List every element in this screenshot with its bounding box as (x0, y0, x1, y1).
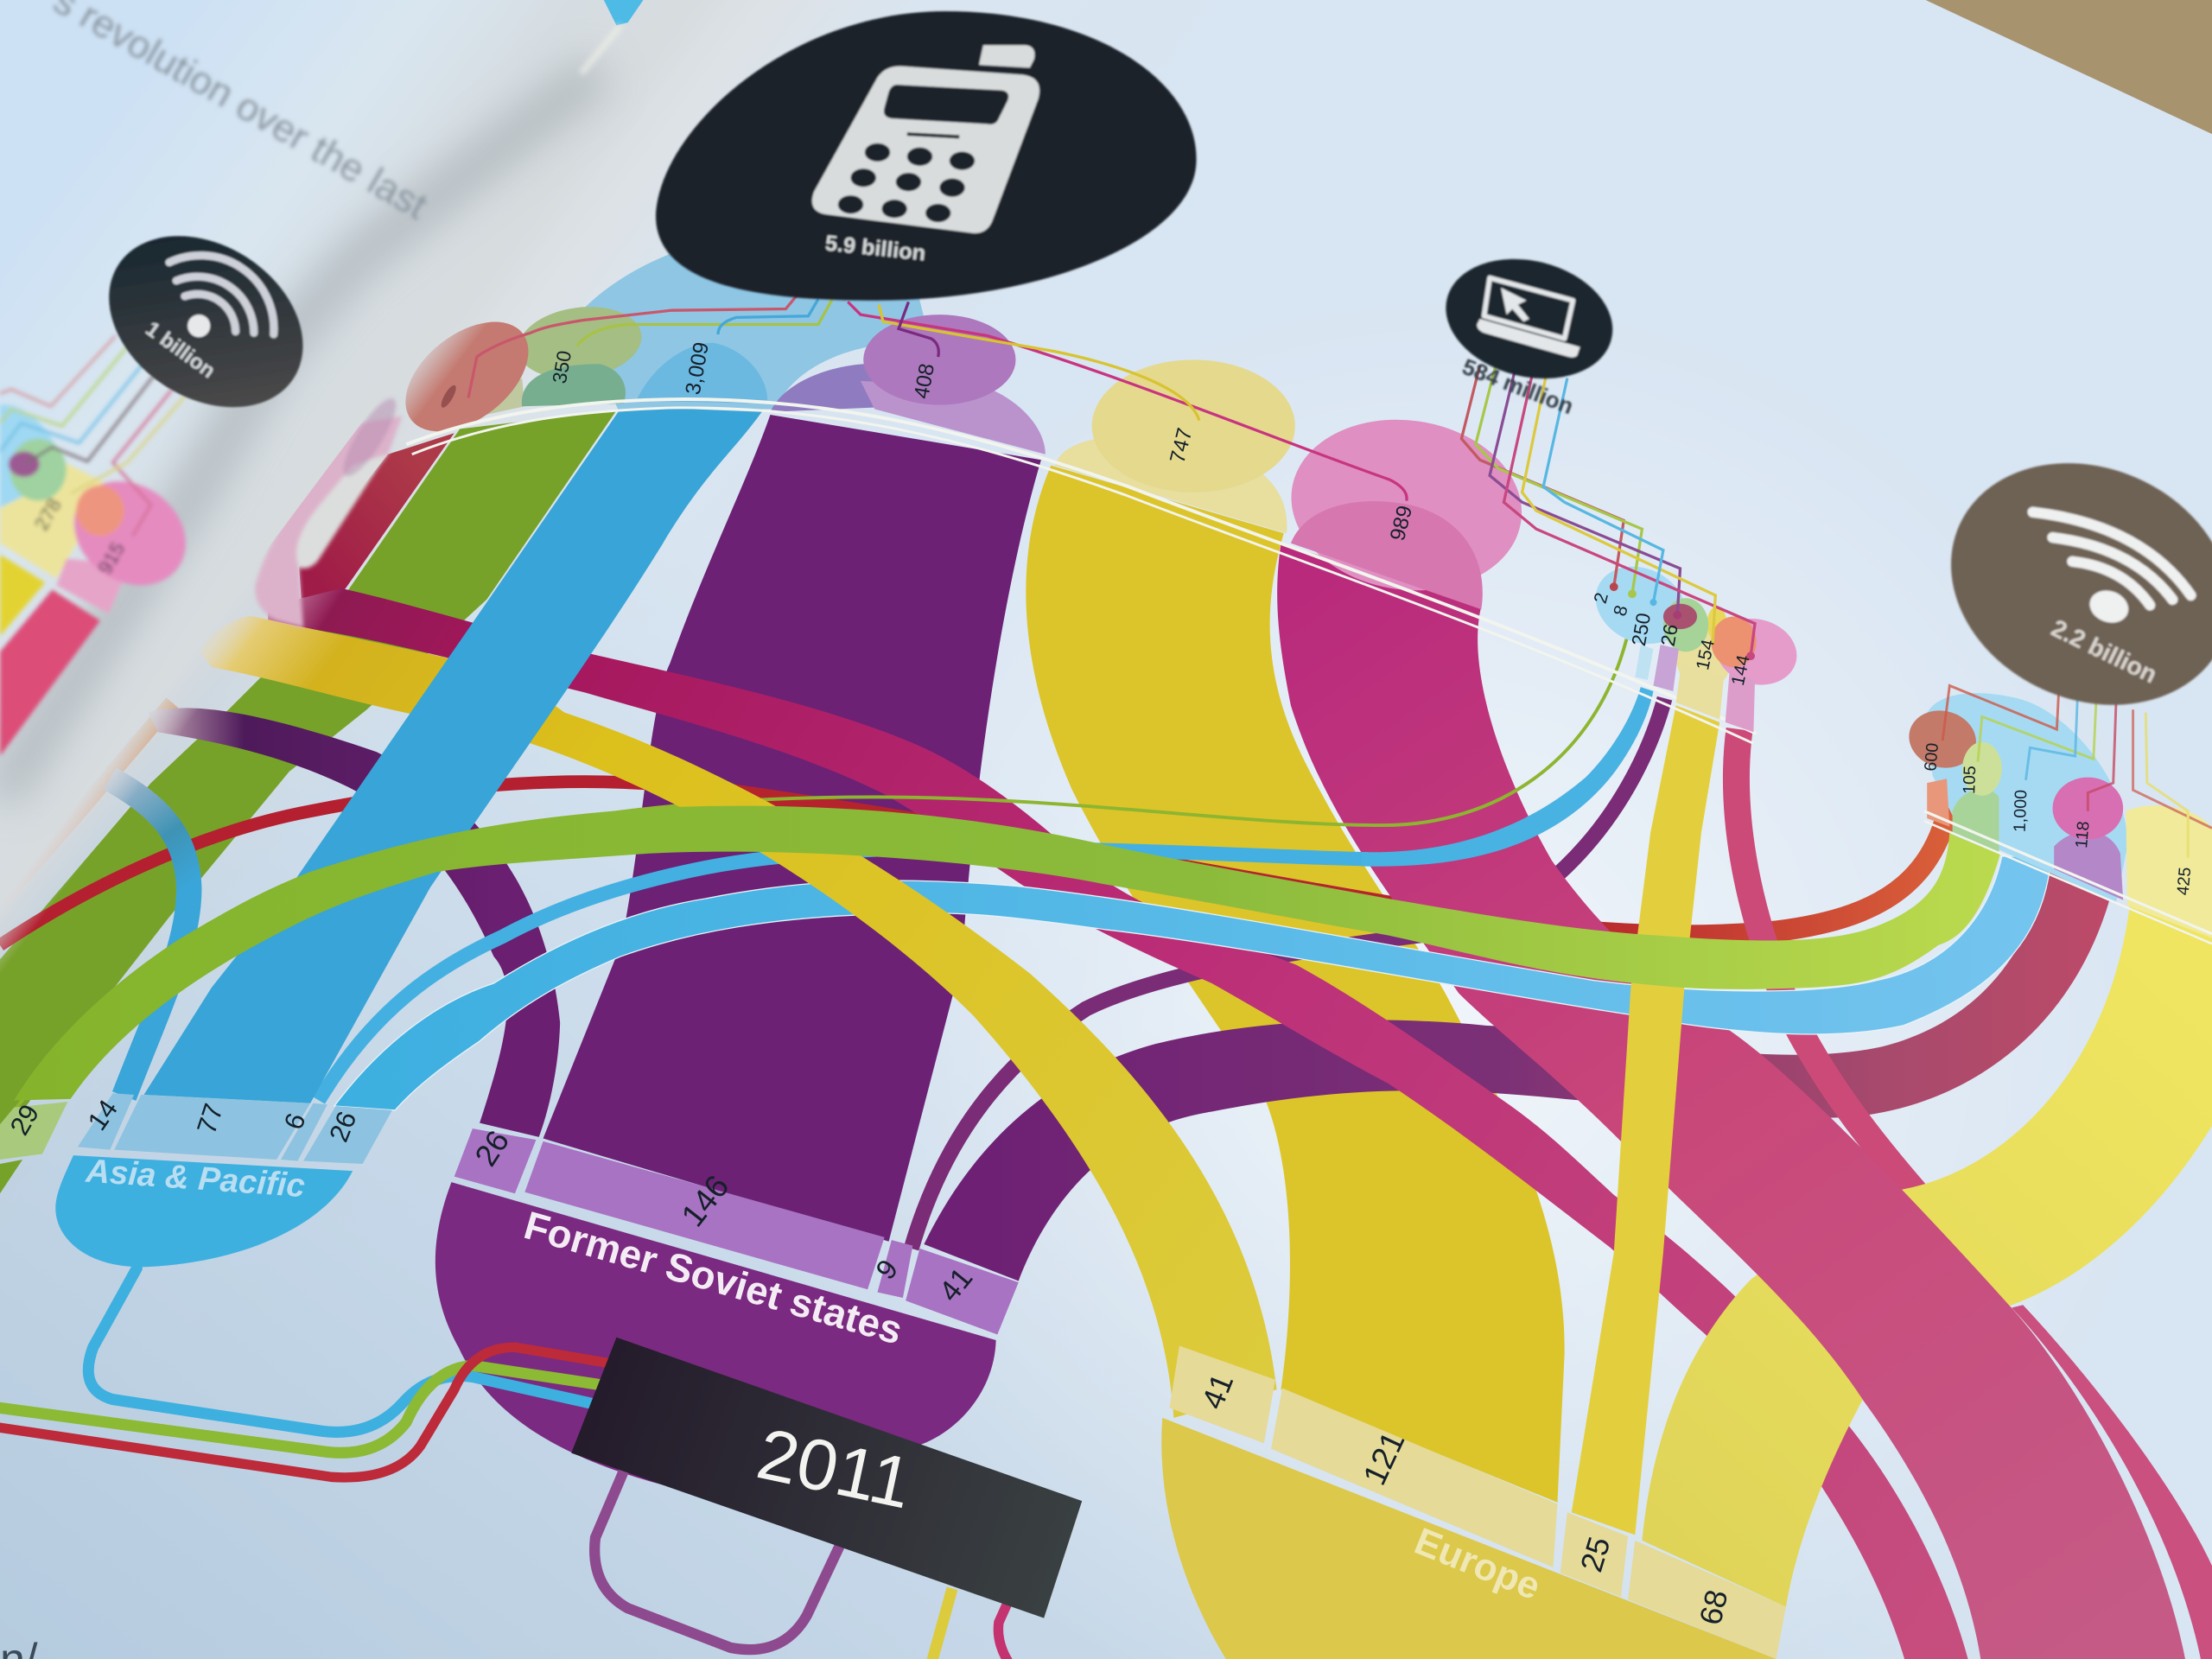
ribbon: blue 3009 (144, 406, 762, 1103)
cap: yellow (0, 454, 113, 578)
ribbon: red left (0, 782, 705, 945)
label: 1 billion: 1 billion (141, 317, 219, 383)
pale patch beside green (473, 378, 524, 417)
bubble body (1433, 242, 1625, 396)
value: 278: 278 (29, 494, 66, 534)
values: 41 (1194, 1369, 1240, 1414)
ribbon: dark red block (299, 433, 454, 628)
icon: wi-fi (2033, 512, 2191, 628)
cap: yellow (1055, 436, 1287, 533)
value: 915: 915 (93, 538, 129, 578)
cap: orange (1927, 779, 1949, 827)
ribbon: blue 14 (110, 779, 189, 1096)
laptop bubble: 584 million (1433, 242, 1625, 419)
ribbon: thin purple 9 (912, 698, 1665, 1249)
values: 14 (82, 1094, 124, 1135)
cluster values: 425 (2174, 867, 2195, 896)
cap: magenta (1291, 501, 1483, 609)
label strip segments (78, 1093, 392, 1164)
ribbon: magenta 989 (1277, 543, 2185, 1659)
cluster values (1591, 591, 1754, 687)
values: 6 (278, 1109, 312, 1134)
values: 146 (674, 1168, 736, 1233)
region name: Former Soviet states (519, 1203, 907, 1353)
label: 584 million: 584 million (1459, 353, 1577, 419)
cluster values (1921, 742, 2195, 896)
cap: green (1953, 789, 1999, 854)
connector lines to left wi-fi (0, 336, 185, 536)
green strip segment 29 (0, 1102, 67, 1160)
right-hand cluster: wi-fi bubbles (1903, 673, 2212, 944)
value: 350: 350 (548, 349, 575, 385)
wi-fi bubble: 2.2 billion (1912, 420, 2212, 748)
ribbon: thin green (0, 639, 1626, 1128)
bubble: green (1962, 742, 2002, 796)
band: pink (0, 589, 100, 756)
ribbon: magenta 144 (1736, 729, 1940, 1220)
bubble body (77, 201, 335, 442)
icon: mobile phone (812, 45, 1039, 233)
region name: Europe (1408, 1520, 1546, 1608)
values (4, 1094, 362, 1146)
cap: green (522, 364, 626, 406)
ribbon: blue 250 (319, 848, 1369, 1100)
bubble: yellow small (1707, 607, 1726, 640)
box (571, 1338, 1082, 1618)
right-hand small cluster: laptops bubbles (1461, 365, 1804, 732)
phone bubble: 5.9 billion (656, 11, 1197, 301)
cluster values: 26 (1656, 622, 1682, 648)
cluster values: 1,000 (2011, 790, 2031, 832)
bubble: blue (0, 404, 60, 508)
band: yellow (0, 555, 45, 636)
page edge highlight (582, 25, 620, 73)
dark spot on red bubble (439, 384, 459, 410)
bubble: blue (1924, 693, 2127, 903)
values (1194, 1369, 1734, 1628)
ribbon: magenta band (268, 588, 1968, 1659)
bubble: pink (2053, 778, 2123, 839)
ribbon: yellow 68 (1642, 903, 2212, 1607)
left page sheet (0, 0, 678, 906)
values: 26 (323, 1107, 362, 1146)
label: 2.2 billion: 2.2 billion (2047, 614, 2161, 690)
ribbon: green 29 (14, 806, 2000, 1100)
bubble: purple small (9, 451, 40, 477)
bubble: pink (1708, 610, 1804, 694)
icon: wi-fi (169, 256, 274, 337)
pale pink arm (255, 416, 402, 628)
icon: laptop (1477, 278, 1580, 358)
label: 5.9 billion: 5.9 billion (824, 232, 927, 266)
values (467, 1124, 979, 1308)
values: 68 (1692, 1586, 1734, 1628)
values: 41 (933, 1262, 979, 1308)
year: 2011: 2011 (751, 1413, 918, 1524)
bubble: blue (1583, 552, 1699, 658)
bubble: pink 915 (54, 460, 206, 607)
connector: magenta (998, 1594, 1012, 1659)
ribbon: green block (0, 410, 616, 1142)
ribbon: yellow 747 (1026, 466, 1565, 1503)
bowl (435, 1182, 996, 1496)
bubble: 989 (1281, 405, 1533, 605)
bowl (1161, 1418, 1777, 1659)
year box (571, 1338, 1082, 1618)
cap: purple left (770, 364, 903, 412)
value: 747: 747 (1166, 426, 1197, 466)
connector: blue from Asia (88, 1268, 593, 1432)
region: Former Soviet states (435, 1124, 1019, 1496)
values: 9 (869, 1253, 904, 1285)
value: 3,009: 3,009 (682, 340, 714, 397)
ribbon: purple to Former Soviet 26 (148, 708, 560, 1137)
bubble: coral (76, 486, 124, 536)
caps below cluster (1635, 645, 1653, 680)
bubble: 1 billion wi-fi (77, 201, 335, 442)
ribbon: orange streak near fold (0, 702, 172, 903)
fold shadow (0, 71, 600, 797)
ribbon: blue 26 (334, 856, 2051, 1110)
blue tab at top of page (604, 0, 643, 25)
bell: light blue (571, 254, 924, 409)
bubble: green (10, 439, 67, 501)
ribbon: blue 250 upper end (1362, 687, 1653, 867)
cluster values: 250 (1627, 611, 1655, 647)
ribbon: yellow 41 (200, 616, 1277, 1418)
cluster values: 118 (2072, 820, 2094, 849)
bubble: yellow (1676, 622, 1732, 690)
values: 29 (4, 1099, 45, 1141)
ribbon: red right (677, 769, 1954, 936)
region: Europe (1161, 1346, 1786, 1659)
cluster values: 8 (1611, 603, 1632, 619)
ribbon: yellow 154 to 25 (1572, 705, 1719, 1535)
connector: green (0, 1365, 604, 1452)
value: 989: 989 (1386, 503, 1417, 543)
connector: purple loop (594, 1471, 841, 1649)
connectors from phone bubble (468, 294, 1407, 501)
cap: purple right (861, 381, 1046, 454)
curved header band (406, 399, 1757, 734)
bowl (55, 1155, 353, 1267)
faint purple bubble (335, 392, 404, 482)
value: 408: 408 (910, 362, 939, 401)
bubble: red (1663, 604, 1697, 629)
cluster values: 2 (1591, 591, 1612, 606)
bubble: orange (1711, 616, 1757, 667)
left-page blurred content (0, 0, 434, 756)
pale hole (296, 454, 386, 569)
cap: yellow right (2126, 805, 2212, 938)
connectors from wi-fi bubble (1942, 673, 2212, 858)
connectors from laptop bubble (1461, 365, 1755, 656)
lower connectors into year box (0, 1268, 1012, 1659)
ribbon: purple 408 (543, 415, 1041, 1242)
ribbon: purple 41 (924, 832, 2123, 1281)
cap: purple (2054, 831, 2123, 900)
values: 77 (191, 1100, 229, 1138)
cluster values: 144 (1728, 653, 1754, 687)
label strip segments (454, 1128, 1019, 1334)
values: 121 (1356, 1426, 1412, 1491)
divider band (1924, 811, 2212, 934)
bubble: red (1903, 703, 1982, 775)
bubble: green 350 (513, 299, 646, 386)
top bubbles: mobile totals by region (385, 254, 1757, 743)
cluster values: 105 (1960, 766, 1980, 794)
left page (0, 0, 678, 906)
bubble: 408 (863, 315, 1016, 405)
bubble: 3,009 dome (636, 343, 767, 404)
connector: yellow (931, 1588, 952, 1659)
ribbon: magenta 144 lower (2012, 1305, 2212, 1659)
fold area shapes (255, 392, 404, 628)
cluster values: 154 (1693, 638, 1719, 672)
connector end dots (1610, 582, 1755, 660)
values: 25 (1573, 1533, 1617, 1576)
label strip segments (1169, 1346, 1786, 1659)
region: Asia & Pacific (0, 1093, 392, 1267)
bubble: 747 (1092, 359, 1295, 493)
bubble: red (385, 300, 549, 454)
green tail below strip (0, 1160, 22, 1193)
cap: pink (56, 559, 123, 613)
bubble body (656, 11, 1197, 301)
bubble body (1912, 420, 2212, 748)
values: 26 (467, 1124, 516, 1173)
flows: Sankey ribbons (0, 406, 2212, 1659)
cluster values: 600 (1921, 742, 1942, 772)
connector: red (0, 1347, 607, 1478)
bubble: green (1663, 598, 1708, 652)
region name: Asia & Pacific (84, 1152, 306, 1205)
